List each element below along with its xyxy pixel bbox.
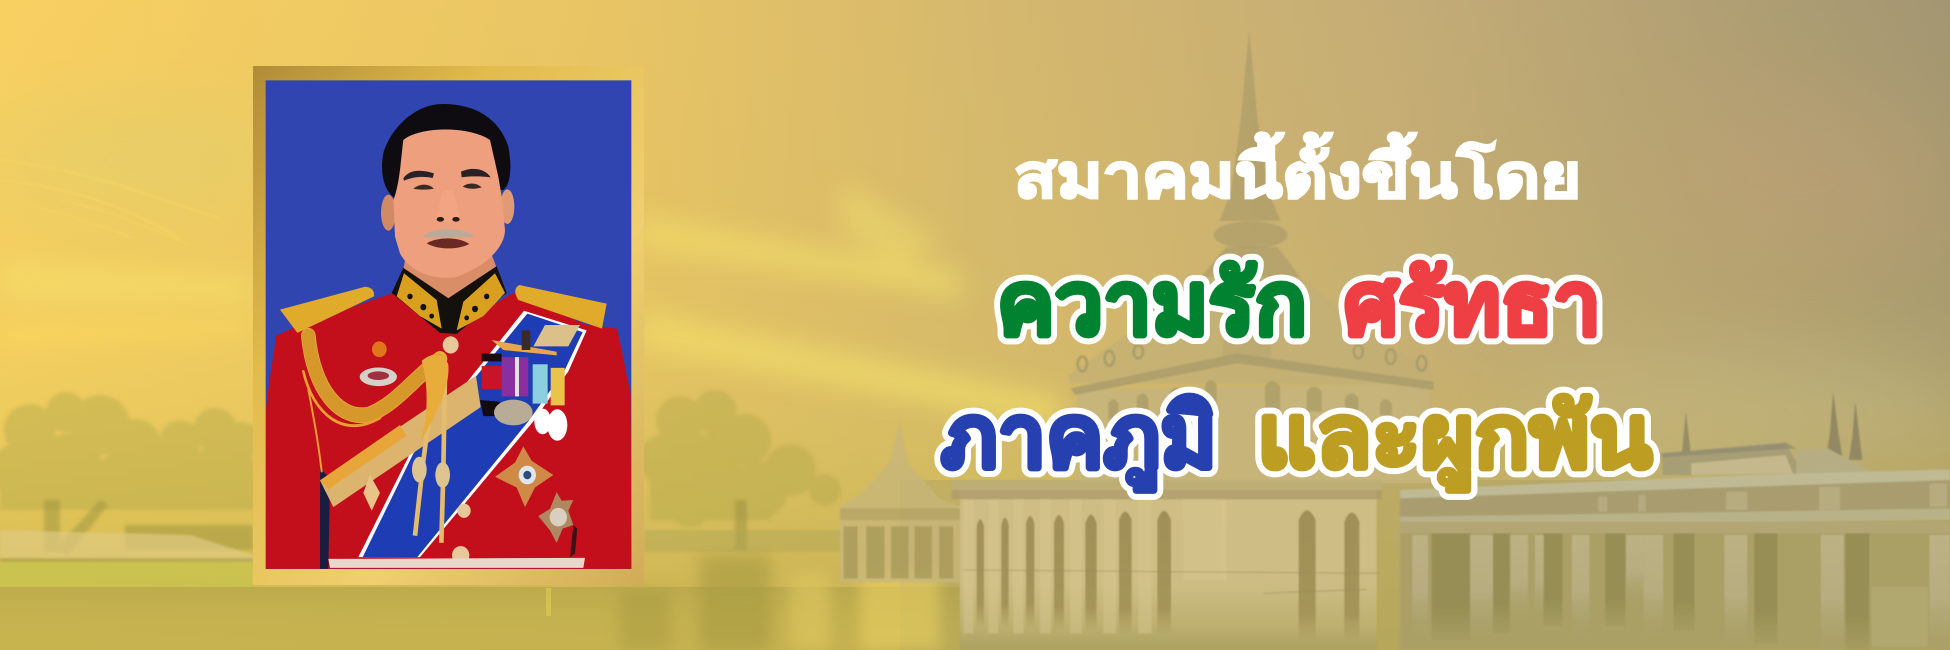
- headline word: และผูกพัน: และผูกพัน: [1257, 387, 1652, 492]
- portrait: badges on the chest: [360, 330, 557, 386]
- background: sunlight rays: [0, 160, 1060, 430]
- background: water with reflections: [0, 555, 960, 650]
- portrait: hanging aiguillettes: [363, 354, 450, 543]
- portrait: head: [381, 104, 514, 278]
- portrait: blue sash: [358, 311, 587, 557]
- temple: left pavilion: [840, 422, 960, 583]
- portrait: star orders: [495, 446, 573, 543]
- portrait: collar with gold embroidery: [392, 266, 507, 334]
- portrait: medal ribbons and medals: [480, 354, 567, 441]
- portrait: officer in red dress uniform: [266, 80, 631, 569]
- portrait: gold shoulder cords: [303, 336, 440, 471]
- temple: spire and roof: [1068, 30, 1433, 384]
- portrait: beige braid band: [320, 376, 481, 507]
- portrait: belt: [328, 558, 585, 568]
- background: left trees: [0, 390, 841, 556]
- headline word: ความรัก: ความรัก: [997, 254, 1307, 353]
- temple: pavilion, colonnade and distant buildings: [840, 30, 1950, 650]
- portrait: gold frame: [253, 66, 644, 585]
- headline word: และผูกพัน: และผูกพัน: [1257, 387, 1652, 492]
- portrait: neck: [403, 250, 497, 300]
- headline word: ภาคภูมิ: ภาคภูมิ: [941, 387, 1217, 492]
- headline word: ศรัทธา: ศรัทธา: [1344, 254, 1601, 353]
- heading: intro line: สมาคมนี้ตั้งขึ้นโดย: [1014, 132, 1581, 210]
- portrait: buttons: [443, 336, 471, 565]
- temple: main building: [952, 345, 1434, 650]
- temple: distant palace and spires: [1661, 392, 1872, 475]
- temple: right colonnade: [1400, 392, 1950, 650]
- portrait: epaulettes: [280, 285, 607, 333]
- portrait: blue backdrop: [266, 80, 631, 569]
- portrait: red tunic: [266, 293, 631, 569]
- headline word: ศรัทธา: ศรัทธา: [1344, 254, 1601, 353]
- background: ground and lawn on the left: [0, 530, 844, 587]
- headline word: ความรัก: ความรัก: [997, 254, 1307, 353]
- headline word: ภาคภูมิ: ภาคภูมิ: [941, 387, 1217, 492]
